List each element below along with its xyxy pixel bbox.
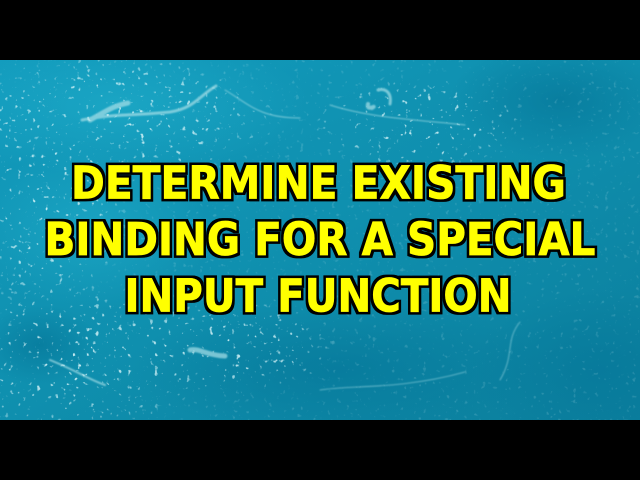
black letterbox bar: bottom bbox=[0, 420, 640, 480]
black letterbox bar: top bbox=[0, 0, 640, 60]
title line 1: DETERMINE EXISTING bbox=[71, 156, 566, 210]
foam streaks bbox=[50, 86, 520, 390]
title line 2: BINDING FOR A SPECIAL bbox=[44, 213, 596, 266]
water background photo bbox=[0, 60, 640, 420]
thumbnail canvas bbox=[0, 60, 640, 420]
title bbox=[44, 156, 596, 322]
title line 3: INPUT FUNCTION bbox=[124, 270, 512, 322]
